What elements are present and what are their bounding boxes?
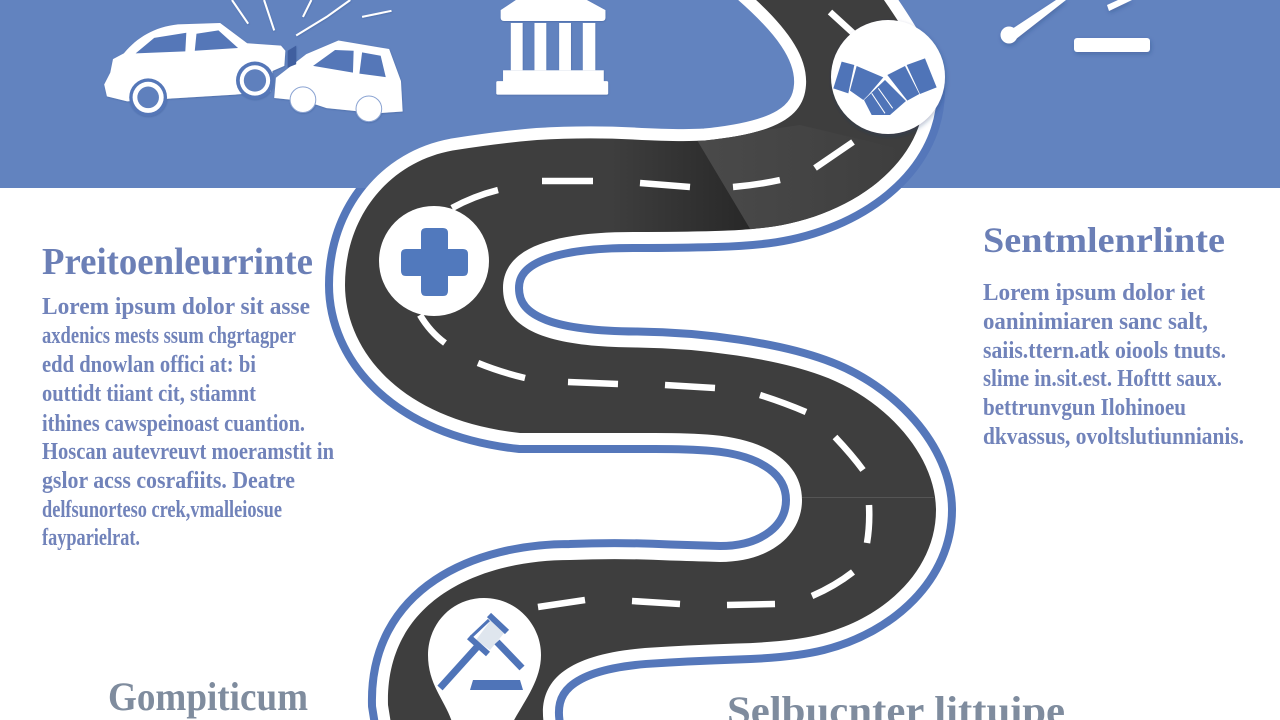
text block: left: gslor acss cosrafiits. Deatre	[42, 468, 295, 494]
icon: gavel map pin	[428, 598, 541, 720]
icon: top right gavel fragment	[1000, 0, 1150, 52]
text block: right: Lorem ipsum dolor iet	[983, 280, 1205, 306]
text block: left: ithines cawspeinoast cuantion.	[42, 411, 305, 437]
text block: left: outtidt tiiant cit, stiamnt	[42, 381, 256, 407]
text block: right	[983, 280, 1244, 450]
text block: right: saiis.ttern.atk oiools tnuts.	[983, 338, 1226, 364]
text block: left: edd dnowlan offici at: bi	[42, 352, 256, 378]
icon: car crash	[104, 0, 403, 122]
text block: right: dkvassus, ovoltslutiunnianis.	[983, 424, 1244, 450]
heading: bottom left: Gompiticum	[108, 674, 308, 719]
icon: medical cross marker	[379, 206, 489, 316]
text block: right: bettrunvgun Ilohinoeu	[983, 395, 1186, 421]
heading: left: Preitoenleurrinte	[42, 241, 313, 283]
text block: left: Hoscan autevreuvt moeramstit in	[42, 439, 334, 465]
text block: left	[42, 294, 334, 551]
icon: courthouse	[496, 0, 608, 95]
text block: left: axdenics mests ssum chgrtagper	[42, 323, 296, 349]
text block: right: slime in.sit.est. Hofttt saux.	[983, 366, 1222, 392]
text block: left: fayparielrat.	[42, 525, 140, 551]
text block: left: delfsunorteso crek,vmalleiosue	[42, 497, 282, 523]
road centre dashes	[420, 12, 869, 607]
winding road	[345, 0, 936, 720]
panel: blue header band	[0, 0, 1280, 188]
text block: left: Lorem ipsum dolor sit asse	[42, 294, 310, 320]
heading: right: Sentmlenrlinte	[983, 220, 1225, 260]
icon: handshake marker	[831, 20, 945, 134]
text block: right: oaninimiaren sanc salt,	[983, 309, 1208, 335]
